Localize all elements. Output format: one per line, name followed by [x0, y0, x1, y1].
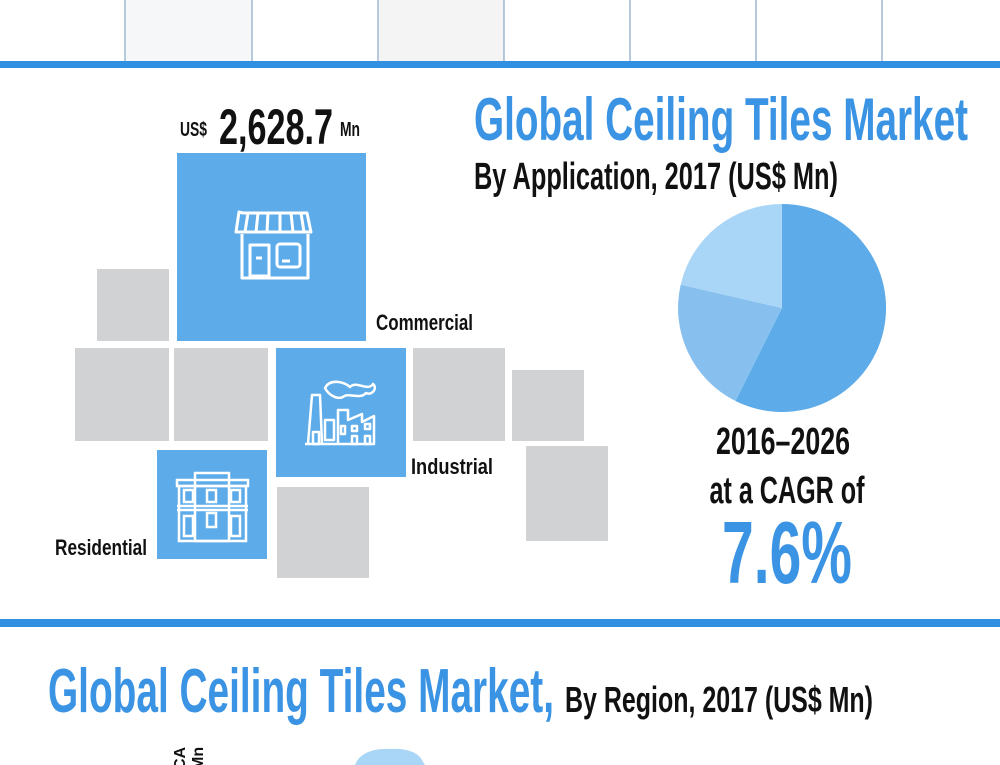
- total value label: Mn: [340, 119, 360, 141]
- icon: factory: [305, 382, 375, 444]
- segment labels: Commercial: [376, 310, 473, 335]
- total value label: US$: [180, 119, 207, 141]
- CAGR callout: 7.6%: [722, 503, 852, 602]
- segment labels: Industrial: [411, 454, 493, 479]
- CAGR callout: [710, 421, 865, 602]
- tile mosaic: [75, 153, 608, 578]
- region map teaser: [172, 746, 425, 765]
- icon: store: [236, 212, 311, 278]
- total value label: 2,628.7: [219, 99, 333, 155]
- title: region: Global Ceiling Tiles Market,: [48, 657, 554, 726]
- total value label: [180, 99, 360, 155]
- icon: apartment building: [177, 473, 248, 541]
- segment labels: Residential: [55, 535, 147, 560]
- top ceiling tiles strip: [0, 0, 1000, 61]
- tile: commercial: [177, 153, 366, 341]
- title: application: [474, 86, 968, 198]
- tile: residential: [157, 450, 267, 559]
- CAGR callout: 2016–2026: [716, 421, 850, 463]
- CAGR callout: at a CAGR of: [710, 470, 865, 512]
- tile: industrial: [276, 348, 406, 477]
- segment labels: [55, 310, 493, 560]
- pie chart: [678, 204, 886, 412]
- title: region: By Region, 2017 (US$ Mn): [565, 679, 873, 720]
